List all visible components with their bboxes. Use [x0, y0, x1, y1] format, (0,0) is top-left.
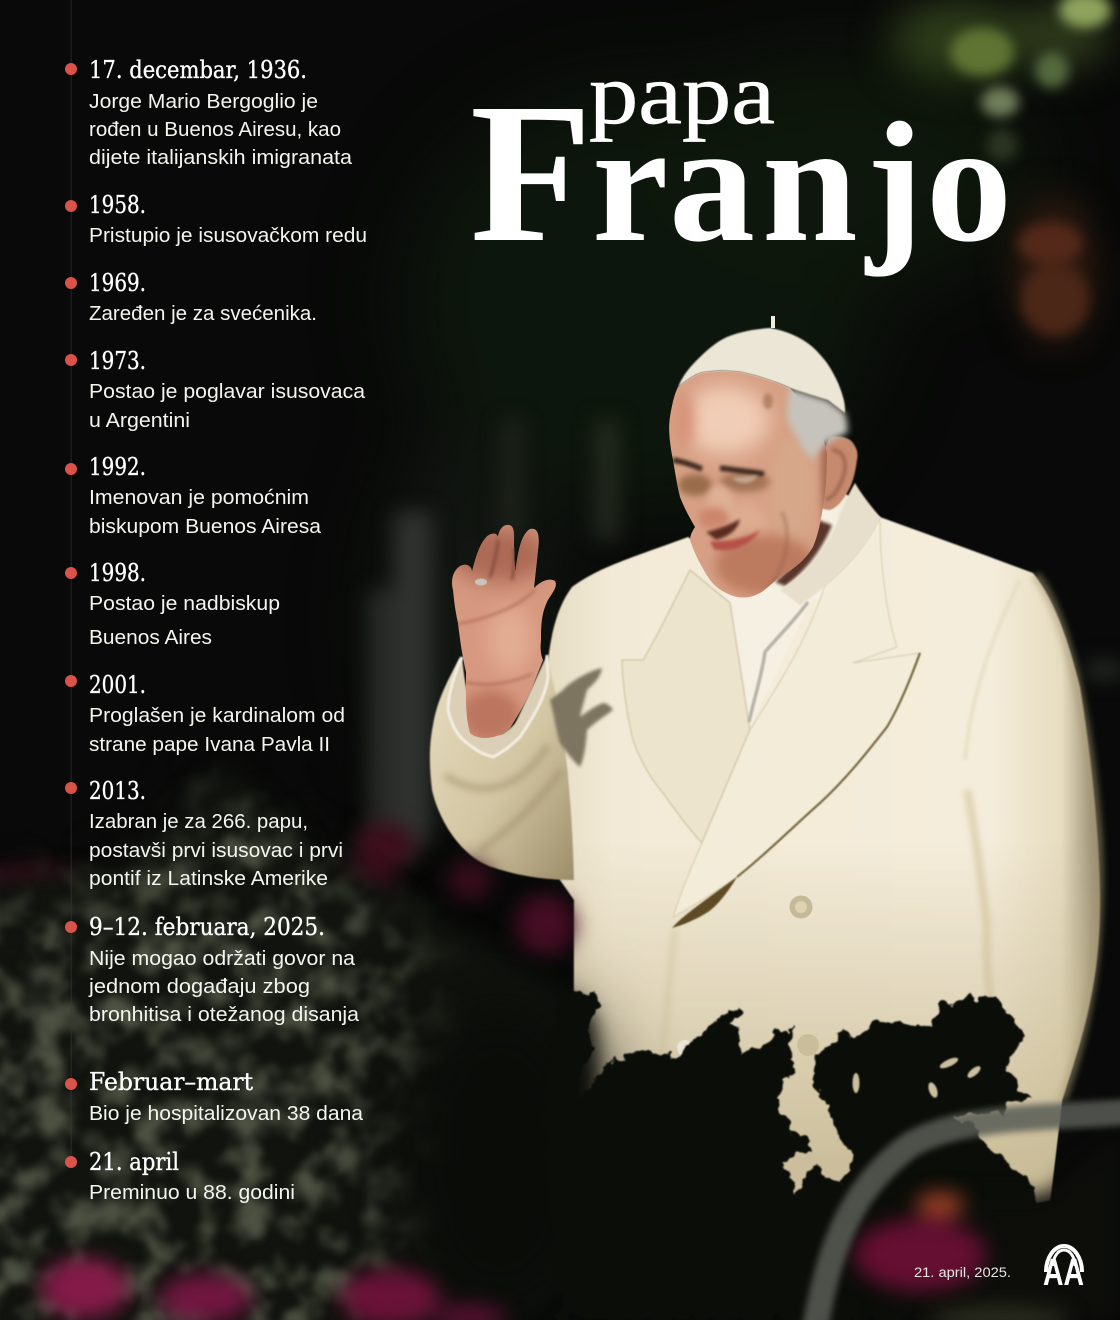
event: 1998.: 1998. — [89, 558, 146, 587]
double-breast shadow — [672, 877, 737, 928]
event: 1973.: 1973. — [89, 346, 146, 375]
left sleeve — [430, 657, 574, 880]
event: 9–12. februara, 2025.: bronhitisa i otežanog disanja — [89, 1004, 360, 1026]
event: 1973.: u Argentini — [89, 410, 190, 432]
Franjo: F — [470, 63, 592, 284]
lapel under-seam — [662, 930, 678, 1051]
event: 1992.: biskupom Buenos Airesa — [89, 516, 322, 538]
coat button — [790, 896, 812, 918]
blurred foreground railing — [815, 1112, 1120, 1320]
blurred flowers — [0, 823, 575, 955]
event: 1969.: Zaređen je za svećenika. — [89, 303, 317, 325]
cap stem — [771, 316, 775, 328]
event: 1998. — [65, 558, 280, 649]
right dark lower area — [880, 1130, 1120, 1320]
icon: Anadolu Agency logo — [1043, 1246, 1084, 1294]
event: 2013.: 2013. — [89, 776, 146, 805]
event: Februar–mart: Bio je hospitalizovan 38 dana — [89, 1103, 364, 1125]
event: 1969.: 1969. — [89, 268, 146, 297]
collar fold — [780, 483, 880, 605]
coat lower tone — [574, 885, 1100, 1202]
hair — [787, 388, 848, 460]
event: 2001.: 2001. — [89, 670, 146, 699]
ring — [475, 578, 487, 586]
raised hand — [452, 524, 556, 738]
event: 1958.: 1958. — [89, 190, 146, 219]
dark center of bush — [390, 990, 610, 1320]
event: 17. decembar, 1936.: rođen u Buenos Airesu, kao — [89, 119, 341, 141]
neck shadow — [775, 520, 832, 586]
event: 2001. — [65, 670, 345, 756]
Franjo: ranjo — [592, 88, 1012, 278]
event: 9–12. februara, 2025.: jednom događaju zbog — [88, 976, 310, 998]
event: 1958.: Pristupio je isusovačkom redu — [89, 225, 367, 247]
event: 1998.: Buenos Aires — [89, 627, 212, 649]
nose shadow — [706, 519, 740, 540]
event: 17. decembar, 1936.: 17. decembar, 1936. — [89, 55, 307, 84]
event: 17. decembar, 1936.: dijete italijanskih imigranata — [89, 147, 353, 169]
arm seam shading — [962, 788, 995, 998]
event: 1992.: Imenovan je pomoćnim — [89, 487, 309, 509]
timeline — [65, 0, 367, 1204]
event: 2001.: strane pape Ivana Pavla II — [89, 734, 330, 756]
event: Februar–mart — [65, 1067, 364, 1125]
coat right-edge shadow — [1035, 575, 1099, 1100]
ear — [817, 436, 858, 510]
foreground foliage silhouette — [540, 987, 1060, 1320]
event: 9–12. februara, 2025.: Nije mogao održati govor na — [89, 948, 356, 970]
icon: Anadolu Agency logo: AA — [1043, 1252, 1084, 1294]
eye — [732, 475, 758, 483]
zucchetto cap — [678, 328, 845, 413]
event: 9–12. februara, 2025. — [65, 912, 360, 1026]
jowl crease — [767, 512, 787, 590]
event: 1998.: Postao je nadbiskup — [89, 593, 280, 615]
event: 1973.: Postao je poglavar isusovaca — [89, 381, 366, 403]
pectoral chain — [749, 602, 808, 722]
event: Februar–mart: Februar–mart — [89, 1067, 253, 1096]
event: 2013.: pontif iz Latinske Amerike — [89, 868, 328, 890]
timeline line — [70, 0, 72, 1162]
event: 2001.: Proglašen je kardinalom od — [89, 705, 345, 727]
event: 9–12. februara, 2025.: 9–12. februara, 2025. — [89, 912, 325, 941]
event: 17. decembar, 1936. — [65, 55, 353, 169]
inner cuff — [460, 655, 547, 755]
event: 2013.: postavši prvi isusovac i prvi — [89, 840, 343, 862]
event: 2013. — [65, 776, 343, 890]
bottom flowers — [41, 1258, 505, 1320]
sleeve folds — [445, 745, 562, 850]
lower-right pale blur — [930, 1306, 1070, 1320]
bush foliage texture — [0, 795, 430, 1320]
mouth — [710, 530, 760, 550]
event: 21. april: Preminuo u 88. godini — [89, 1182, 295, 1204]
event: 1969. — [65, 268, 317, 325]
shoulder seam — [965, 580, 1020, 760]
left bush — [0, 770, 600, 1320]
lapel dark edge — [737, 653, 920, 877]
right lapel — [673, 517, 920, 917]
light gaps in foliage — [852, 1056, 982, 1099]
date: 21. april, 2025. — [914, 1265, 1011, 1280]
event: 1958. — [65, 190, 367, 247]
lower buttons — [677, 1034, 819, 1056]
event: 1973. — [65, 346, 366, 432]
title — [470, 45, 1012, 284]
coat body — [547, 490, 1100, 1250]
head — [669, 370, 827, 598]
lower-right red flower — [854, 1192, 986, 1291]
event: 21. april: 21. april — [89, 1147, 179, 1176]
hand shadow on coat — [550, 668, 613, 767]
left lapel — [622, 570, 750, 843]
shirt front — [724, 506, 838, 720]
event: 1992. — [65, 452, 322, 538]
event: 21. april — [65, 1147, 295, 1204]
cuff edge — [448, 655, 548, 757]
brows — [673, 460, 764, 474]
event: 2013.: Izabran je za 266. papu, — [89, 811, 308, 833]
event: 17. decembar, 1936.: Jorge Mario Bergoglio je — [89, 91, 318, 113]
papa: papa — [589, 45, 775, 142]
event: 1992.: 1992. — [89, 452, 146, 481]
figure: Pope Francis in white coat — [430, 316, 1100, 1250]
